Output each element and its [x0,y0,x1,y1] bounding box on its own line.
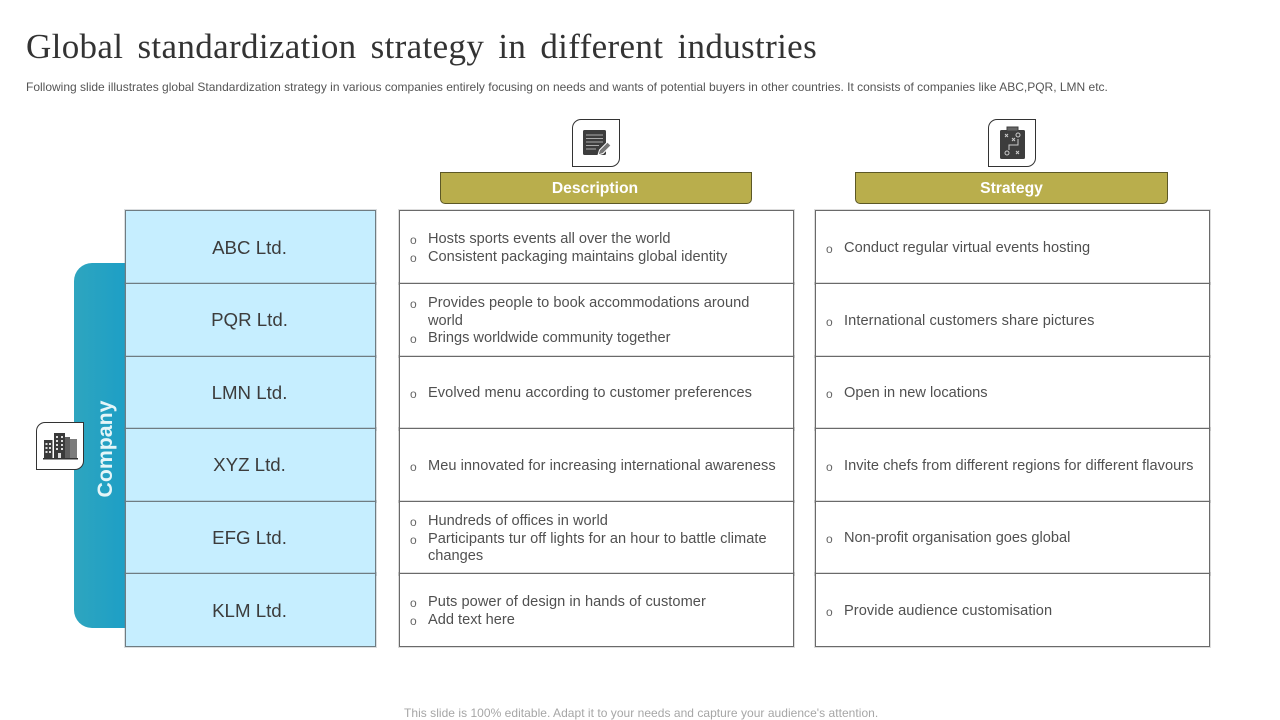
description text: PQR: o [410,332,417,346]
footer note: This slide is 100% editable. Adapt it to your needs and capture your audience's attention. [404,706,878,720]
strategy text: ABC: o [826,242,833,256]
description text: EFG: o [410,533,417,547]
description text: EFG: o [410,515,417,529]
strategy text: LMN: Open in new locations [844,385,988,401]
strategy text: KLM: Provide audience customisation [844,603,1052,619]
description text: PQR: Brings worldwide community together [428,330,671,346]
strategy text: PQR: o [826,315,833,329]
strategy text: KLM: o [826,605,833,619]
description text: EFG: changes [428,548,483,564]
description text: KLM: Puts power of design in hands of customer [428,594,706,610]
description text: PQR: o [410,297,417,311]
row label: LMN Ltd. [125,356,376,430]
panel: strategy cells [814,209,1211,648]
icon: building [36,422,84,470]
heading: strategy [855,172,1168,204]
heading: description: Description [552,180,638,197]
description text: KLM: o [410,614,417,628]
panel: company side label [74,263,126,628]
strategy text: PQR: International customers share pictures [844,313,1094,329]
row label: ABC Ltd. [125,210,376,284]
strategy text: ABC: Conduct regular virtual events hosting [844,240,1090,256]
icon: strategy clipboard [988,119,1036,167]
panel: description cells [398,209,795,648]
description text: ABC: o [410,233,417,247]
description text: PQR [410,295,749,346]
subtitle: Following slide illustrates global Standardization strategy in various companies entirely focusing on needs and wants of potential buyers in other countries. It consists of companies like ABC,PQR, LMN etc. [26,80,1108,94]
heading: description [440,172,752,204]
description text: EFG: Participants tur off lights for an hour to battle climate [428,531,767,547]
description text: ABC: Hosts sports events all over the world [428,231,671,247]
row label: KLM Ltd.: KLM Ltd. [212,600,287,621]
heading: strategy: Strategy [980,180,1043,197]
description text: KLM: o [410,596,417,610]
row label: EFG Ltd.: EFG Ltd. [212,527,287,548]
title: Global standardization strategy in different industries [26,27,817,66]
description text: LMN: Evolved menu according to customer preferences [428,385,752,401]
row label: ABC Ltd.: ABC Ltd. [212,237,287,258]
description text: EFG: Hundreds of offices in world [428,513,608,529]
row label: LMN Ltd.: LMN Ltd. [212,382,287,403]
strategy text: XYZ: o [826,460,833,474]
description text: KLM: Add text here [428,612,515,628]
description text: ABC [410,231,728,265]
description text: PQR: world [428,313,463,329]
row label: EFG Ltd. [125,501,376,575]
strategy text: XYZ: Invite chefs from different regions for different flavours [844,458,1193,474]
description text: EFG [410,513,767,564]
row label: PQR Ltd. [125,283,376,357]
strategy text: EFG: o [826,532,833,546]
company label text: Company [93,400,117,498]
strategy text: EFG: Non-profit organisation goes global [844,530,1070,546]
description text: XYZ: o [410,460,417,474]
icon: document with pen [572,119,620,167]
row label: XYZ Ltd.: XYZ Ltd. [213,454,286,475]
description text: LMN: o [410,387,417,401]
row label: KLM Ltd. [125,573,376,647]
row label: XYZ Ltd. [125,428,376,502]
row label: PQR Ltd.: PQR Ltd. [211,309,288,330]
description text: PQR: Provides people to book accommodations around [428,295,749,311]
description text: ABC: o [410,251,417,265]
description text: ABC: Consistent packaging maintains global identity [428,249,727,265]
description text: XYZ: Meu innovated for increasing international awareness [428,458,776,474]
description text: KLM [410,594,706,628]
strategy text: LMN: o [826,387,833,401]
